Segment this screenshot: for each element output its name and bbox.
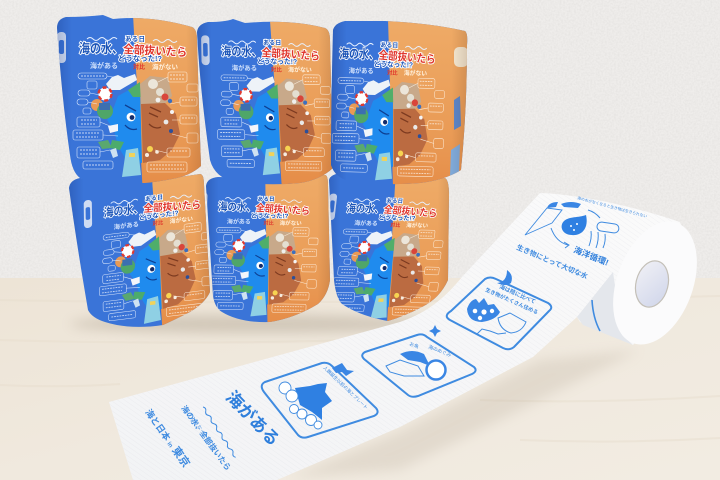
title text [103, 194, 200, 221]
panel text: お魚 [408, 340, 420, 351]
icon: star [429, 325, 441, 337]
title text: 全部抜いたら [143, 198, 201, 215]
title text: 全部抜いたら [123, 42, 187, 59]
title text: 海の水、 [79, 41, 123, 56]
roll: bottom left: 海がない [170, 215, 193, 225]
title text: ある日 [145, 193, 163, 203]
text: roll title on paper: 海の水、全部抜いたら [179, 403, 233, 472]
roll: bottom left: 対比 [152, 218, 164, 227]
roll: top middle: 海がない [288, 66, 312, 74]
title text: 海の水、 [218, 200, 256, 214]
shadow under unrolled paper [290, 350, 640, 478]
icon: blue shell [467, 298, 500, 322]
text: project name on paper: 海と日本 in 東京 [143, 406, 193, 470]
icon: cloud and mountain [279, 382, 332, 429]
panel text: 人類誕生以前の海とプレート [322, 364, 369, 411]
panel: creatures in the sea [447, 270, 551, 349]
roll: bottom right [329, 174, 449, 321]
title text: どうなった!? [118, 53, 162, 63]
title text [339, 41, 436, 70]
roll: top middle: 対比 [271, 65, 282, 74]
text: top edge caption: 海の水がなくなると生き物は生きられない [577, 195, 648, 219]
icon: small mountain [332, 363, 354, 376]
roll end face [597, 210, 713, 356]
text: important water caption: 生き物にとって大切な水 [515, 243, 589, 281]
panel: water cycle illustration [515, 195, 648, 281]
roll: bottom left: 海がある [114, 219, 139, 231]
title text [221, 39, 320, 66]
panel text second line: 生き物がたくさん住める [484, 286, 540, 316]
panel text: 海は陸に比べて [498, 283, 537, 306]
title text: ある日 [380, 42, 398, 50]
wooden shelf [0, 278, 720, 480]
title text [218, 194, 311, 220]
roll: bottom right: 海がない [406, 221, 429, 230]
roll: bottom middle: 対比 [263, 220, 274, 227]
title text: ある日 [125, 35, 145, 43]
roll: bottom middle: 海がない [279, 219, 302, 227]
embossed paper texture [109, 193, 680, 480]
icon: ball fish [426, 360, 446, 380]
roll: bottom middle: 海がある [227, 217, 251, 226]
icon: striped fish [400, 351, 430, 366]
title text: 海の水、 [346, 201, 384, 216]
title text [79, 35, 187, 63]
panel: mountain [262, 363, 378, 438]
arrow: evaporation [551, 210, 600, 248]
title text: 全部抜いたら [255, 201, 311, 217]
title text: どうなった!? [378, 212, 416, 222]
roll: top left: 海がない [152, 62, 178, 71]
decorative wave with small caption [189, 406, 237, 458]
title text: 全部抜いたら [383, 203, 438, 220]
roll: top right: 海がない [404, 69, 427, 78]
icon: outlined shell [498, 313, 526, 333]
title text: 海の水、 [339, 45, 379, 62]
title text: ある日 [263, 39, 281, 47]
icon: fish group [386, 360, 424, 376]
cardboard core hole [631, 257, 673, 311]
shadow under stacked rolls [70, 315, 450, 333]
panel frame [447, 278, 551, 349]
roll: top middle: 海がある [232, 63, 257, 73]
icon: small creature line [477, 329, 506, 334]
wall background [0, 0, 720, 280]
side badge on top right roll [450, 47, 468, 176]
roll: top right [331, 21, 468, 184]
icon: water drop [562, 215, 587, 235]
blue edge stripe [592, 300, 600, 331]
panel: fish in the sea [362, 325, 476, 397]
title text: どうなった!? [374, 59, 413, 70]
roll: top right: 対比 [387, 68, 398, 77]
roll: bottom right: 対比 [390, 222, 401, 229]
title text: 全部抜いたら [378, 48, 436, 66]
text: small caption: どうなった!? [189, 415, 212, 443]
roll: top middle [197, 19, 332, 184]
roll underside [577, 272, 633, 345]
text: umi ga aru heading: 海がある [222, 387, 284, 450]
paper sheet [109, 193, 696, 480]
title text: どうなった!? [251, 211, 289, 220]
roll: top left: 対比 [133, 63, 145, 71]
title text: ある日 [386, 197, 404, 205]
icon: wave [497, 270, 512, 285]
title text: どうなった!? [139, 208, 179, 222]
panel frame [262, 363, 378, 438]
title text [346, 197, 437, 222]
unrolled toilet paper roll [109, 193, 713, 480]
roll: bottom right: 海がある [354, 219, 378, 228]
roll: top left [57, 15, 201, 183]
icon: land outline [525, 208, 562, 235]
title text: 全部抜いたら [261, 46, 320, 63]
icon: clouds [547, 202, 581, 208]
roll: top left: 海がある [90, 61, 118, 70]
icon: small cloud label [596, 222, 619, 233]
arrows: rising vapour [589, 231, 605, 248]
text: cycle caption: 海洋循環! [572, 245, 610, 268]
title text: 海の水、 [221, 43, 262, 59]
roll: bottom left [69, 174, 210, 327]
roll: bottom middle [206, 175, 330, 322]
title text: 海の水、 [104, 201, 143, 220]
panel text right: 海のめぐみ [427, 343, 452, 359]
roll: top right: 海がある [349, 66, 374, 75]
panel frame [362, 334, 476, 397]
title text: ある日 [257, 195, 275, 203]
title text: どうなった!? [257, 57, 297, 66]
